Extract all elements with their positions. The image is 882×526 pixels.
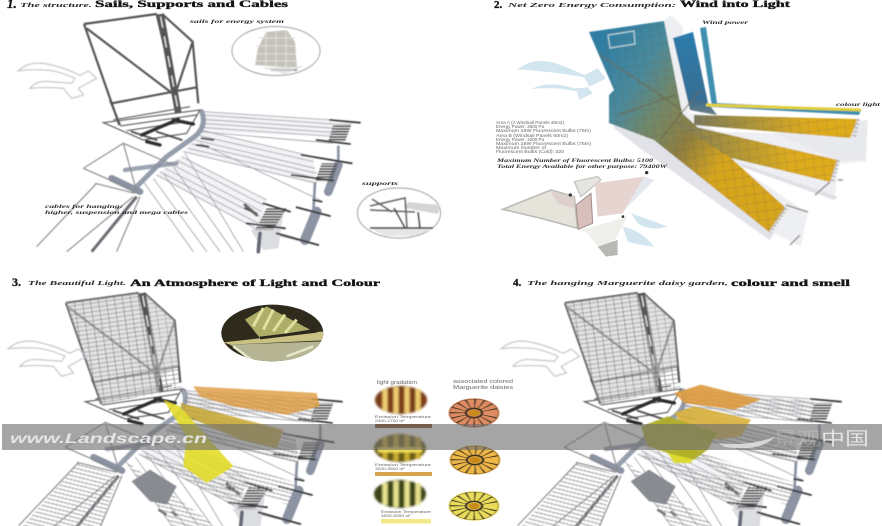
heading: panel 1 title: The structure.	[20, 2, 93, 9]
watermark logo swoosh	[718, 437, 775, 448]
drawing: structure with grid	[518, 293, 841, 526]
panel 1: structure	[7, 0, 440, 252]
label: associated coloured marguerite daisies	[453, 379, 514, 391]
drawing: sails, supports and cables	[37, 14, 360, 252]
heading: panel 4 title: The hanging Marguerite daisy garden,	[527, 280, 729, 287]
label: light gradation: light gradation	[377, 380, 417, 386]
text block: energy specifications: Area B (Windsail Panels 60m2)	[496, 133, 569, 138]
heading: panel 4 title: 4.	[513, 277, 522, 289]
detail circle: lit canopy photo	[220, 303, 327, 363]
label: supports: supports	[360, 182, 398, 187]
light sample: warm orange: 2400-2700 oF	[375, 418, 406, 423]
flower pools: orange, amber and green	[641, 385, 761, 463]
light sample: warm orange	[375, 386, 432, 428]
detail circle: supports	[358, 188, 440, 238]
text block: maximum bulbs and total energy: Total Energy Available for other purpose: 79400W	[497, 164, 668, 170]
panel 2: net zero energy	[494, 0, 881, 257]
icon: wind outline	[18, 63, 97, 98]
heading: panel 2 title	[494, 0, 791, 11]
icon: blue wind	[517, 61, 606, 100]
heading: panel 3 title: 3.	[12, 275, 21, 289]
icon: orange daisy	[450, 446, 500, 474]
text block: energy specifications: Maximum 18W Fluorescent Bulbs (75m)	[496, 128, 592, 133]
light sample: warm orange: Emission Temperature	[375, 414, 432, 419]
heading: panel 2 title: Net Zero Energy Consumption:	[506, 2, 676, 9]
light sample: pale yellow	[374, 480, 432, 524]
drawing: structure with light grid	[19, 293, 342, 526]
icon: wind outline	[8, 341, 87, 376]
heading: panel 3 title	[12, 275, 381, 289]
text block: energy specifications: Area A (2 Windsail Panels 45m2)	[496, 120, 565, 125]
label: cables for hanging: higher, suspension and mega cables	[45, 211, 188, 216]
text block: energy specifications: Energy Power: 3600 Pa	[496, 124, 545, 129]
text block: energy specifications: Energy Power: 3200 Pa	[496, 137, 545, 142]
diagram: solar sails turning wind into light	[589, 15, 868, 247]
light sample: pale yellow: Emission Temperature	[381, 509, 432, 514]
label: cables for hanging	[45, 205, 188, 216]
light sample: amber	[374, 434, 432, 476]
label: associated coloured marguerite daisies: associated colored	[453, 379, 513, 385]
heading: panel 1 title	[7, 0, 289, 11]
icon: yellow daisy	[449, 492, 499, 520]
panel 4: marguerite daisy garden	[449, 277, 851, 526]
label: associated coloured marguerite daisies: Marguerite daisies	[453, 385, 514, 391]
text block: energy specifications	[496, 120, 592, 154]
light sample: amber: Emission Temperature	[375, 462, 432, 467]
watermark logo text	[773, 429, 869, 449]
heading: panel 3 title: An Atmosphere of Light and Colour	[130, 279, 381, 289]
light sample: amber: 3200-3500 oF	[375, 466, 406, 471]
diagram: small axonometric view	[503, 171, 668, 257]
detail circle: sail	[232, 26, 320, 76]
panel 3: beautiful light	[8, 275, 432, 526]
text block: energy specifications: Fluorescent Bulbs (Cold): 320	[496, 149, 565, 154]
watermark text: site address: www.Landscape.cn	[10, 430, 207, 446]
label: wind power: Wind power	[702, 21, 748, 26]
watermark logo text: 景观	[773, 430, 821, 449]
text block: maximum bulbs and total energy: Maximum Number of Fluorescent Bulbs: 5100	[496, 158, 653, 164]
watermark logo text: 中国	[821, 429, 869, 449]
heading: panel 4 title	[513, 277, 851, 289]
text block: energy specifications: Maximum 18W Fluorescent Bulbs (75m)	[496, 141, 592, 146]
icon: pink daisy	[449, 399, 499, 427]
label: sails for energy system: sails for energy system	[188, 20, 284, 25]
heading: panel 3 title: The Beautiful Light.	[28, 280, 127, 287]
text block: energy specifications: Maximum Number of	[496, 145, 547, 150]
light pools: orange and yellow	[163, 386, 320, 483]
icon: wind outline	[501, 341, 580, 376]
heading: panel 1 title: Sails, Supports and Cables	[95, 0, 289, 10]
light sample: pale yellow: 4000-5000 oF	[381, 513, 412, 518]
label: colour light: colour light	[836, 103, 881, 108]
heading: panel 2 title: Wind into Light	[680, 0, 791, 10]
heading: panel 4 title: colour and smell	[731, 279, 851, 289]
label: cables for hanging: cables for hanging:	[45, 205, 124, 210]
text block: maximum bulbs and total energy	[496, 158, 668, 170]
watermark band	[2, 424, 882, 450]
